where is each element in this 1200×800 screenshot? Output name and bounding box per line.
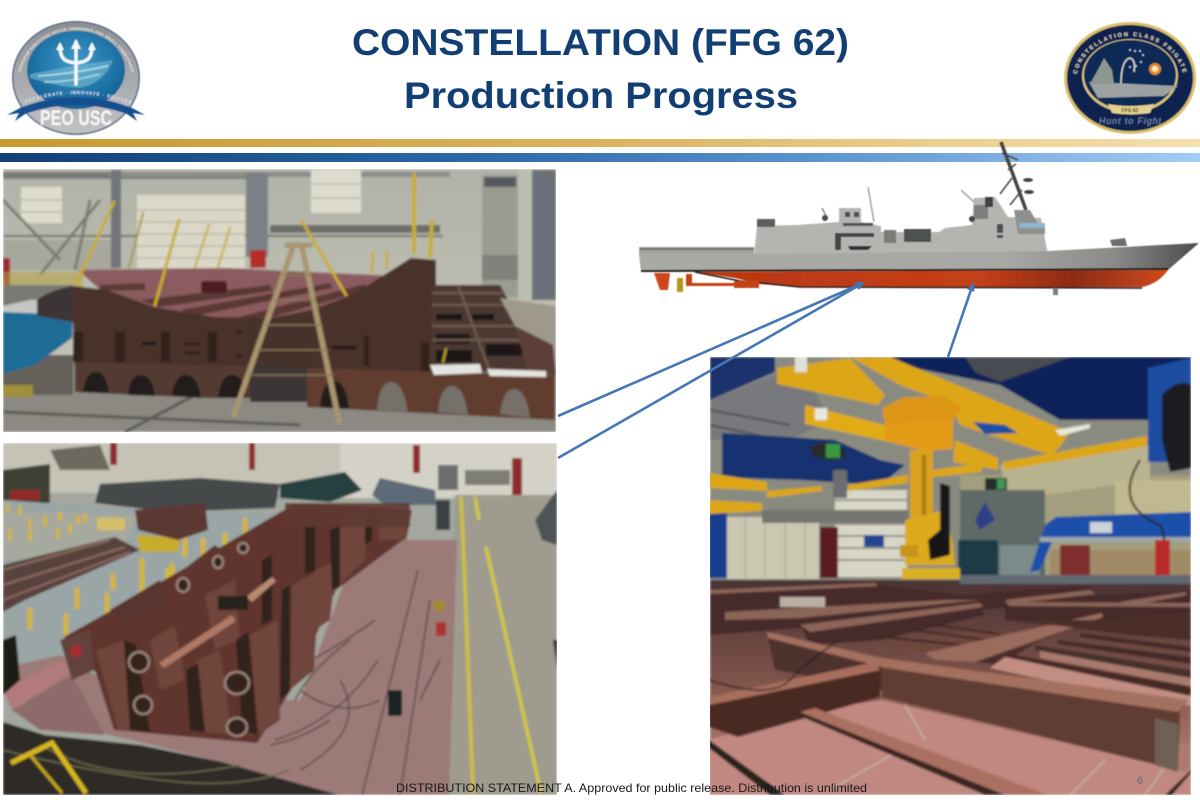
sub: blue covered object [3, 312, 73, 374]
logo: Constellation class frigate seal [1063, 21, 1197, 135]
blue header bar [0, 153, 1200, 162]
sub: dark under-structure and cables [3, 722, 339, 795]
sub: waterline [641, 269, 1168, 271]
sub: floor lane with yellow lines [448, 495, 557, 795]
sub: grey hull [639, 243, 1199, 272]
logo: PEO USC: PROGRAM EXECUTIVE OFFICE UNMANNED AND SMALL COMBATANTS [18, 26, 134, 73]
sub: floor [3, 362, 556, 432]
sub: shop floor at left [3, 498, 270, 662]
sub: left transverse girder [709, 670, 880, 737]
arrow: right photo to ship [948, 284, 973, 357]
sub: top-right blue housing [1148, 358, 1191, 462]
ship profile illustration [639, 142, 1199, 295]
sub: navy ceiling [860, 357, 1191, 420]
sub: curved deck plate [78, 266, 384, 320]
sub: blue welding machine [1030, 512, 1191, 572]
title line 1: CONSTELLATION (FFG 62) [352, 22, 849, 63]
photo: hull module on blocks [3, 169, 556, 432]
gold header bar [0, 139, 1200, 147]
sub: lower grid of frames [434, 284, 528, 374]
sub: superstructure [754, 197, 1048, 255]
photo: stiffened panel assembly on pedestals [3, 443, 557, 795]
sub: arched foundation, left [75, 362, 250, 398]
sub: pink deck plate [3, 540, 457, 795]
logo: PEO USC: PEO USC [40, 107, 112, 130]
logo: Constellation class frigate seal: FFG 62 [1122, 108, 1139, 114]
sub: brown hull wall [37, 258, 436, 378]
sub: back wall, left [727, 517, 819, 579]
sub: aft flight deck [639, 247, 754, 255]
sub: yellow column and lifting tool [910, 450, 933, 518]
logo: Constellation class frigate seal: CONSTELLATION CLASS FRIGATE [1072, 31, 1188, 75]
sub: navy wall band [722, 433, 905, 485]
sub: hoist units [810, 442, 845, 460]
sub: yellow gantry beams [709, 357, 1147, 514]
sub: wooden step ladder [234, 245, 339, 421]
sub: propeller and shaft [677, 278, 683, 292]
title line 2: Production Progress [404, 75, 798, 116]
sub: arched foundation, right [307, 368, 555, 420]
arrow: lower-left photo to ship [558, 283, 863, 458]
sub: bright top flanges [159, 615, 236, 668]
page number: 6 [1137, 775, 1143, 787]
title [352, 22, 849, 116]
sub: stacked steel beams [3, 537, 140, 612]
logo: Constellation class frigate seal: Hunt to Fight [1099, 116, 1161, 126]
sub: yellow safety railing [11, 743, 86, 793]
sub: machinery and mid shop, right [960, 475, 1191, 580]
sub: main longitudinal girder [882, 667, 1180, 770]
logo: PEO USC: ACCELERATE · INNOVATE · DELIVER [24, 90, 132, 104]
sub: yellow shoring poles [77, 175, 446, 362]
sub: long stiffener assembly [64, 503, 412, 743]
sub: right stiffeners [990, 633, 1191, 706]
sub: boat bay [835, 233, 874, 250]
sub: yellow pedestals [30, 520, 245, 634]
sub: rudder [654, 273, 670, 290]
sub: lightening holes [129, 543, 249, 736]
sub: plate under main girder [709, 700, 1191, 795]
sub: protective sheets [430, 364, 482, 375]
logo: PEO USC [7, 20, 145, 136]
sub: mast [822, 142, 1026, 222]
arrow: upper-left photo to ship [558, 283, 863, 416]
sub: cable [709, 640, 840, 690]
sub: cross girder [976, 634, 1056, 665]
distribution statement: DISTRIBUTION STATEMENT A. Approved for public release. Distribution is unlimited [396, 781, 867, 795]
sub: orange rotating hub and arm [805, 405, 885, 441]
sub: steel panel floor [710, 580, 1191, 795]
photo: panel line with yellow gantry [709, 357, 1191, 795]
sub: red underbody [695, 270, 1168, 287]
sub: long floor stiffener [800, 708, 1048, 795]
